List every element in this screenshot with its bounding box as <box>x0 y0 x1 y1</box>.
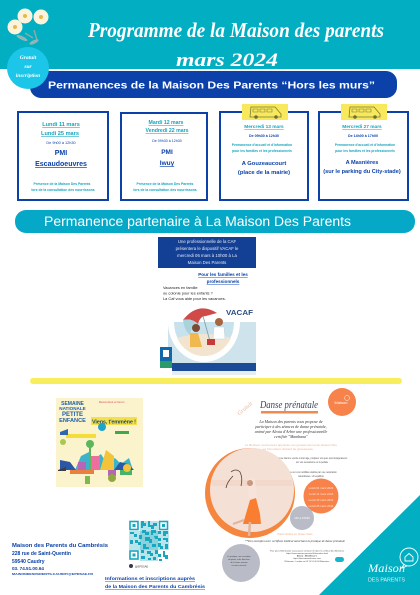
text block: informations et inscriptions <box>105 576 206 589</box>
icon: orange badge: Maison <box>335 400 347 405</box>
section heading: permanence partenaire <box>15 210 415 233</box>
text block: address <box>12 543 108 576</box>
icon: social handle: @EPDSAE <box>135 564 148 568</box>
panel: card Iwuy <box>121 113 207 200</box>
text block: vacances: La Caf vous aide pour les vacances. <box>163 296 226 301</box>
text block: address: Maison des Parents du Cambrésis <box>12 543 108 549</box>
panel: card Escaudoeuvres: Lundi 25 mars <box>41 131 79 137</box>
text block: danse prénatale: participer à des séances de danse prénatale, <box>254 424 327 430</box>
badge: gratuit sur inscription: sur <box>23 64 33 70</box>
text block: vacances <box>163 285 226 301</box>
panel: card Masnières: Permanence d'accueil et d'information <box>335 143 395 147</box>
section heading: hors les murs <box>30 71 397 98</box>
text block: renseignements danse: https://alexiamamahouse.com <box>293 557 321 560</box>
panel: card Iwuy: Mardi 12 mars <box>149 120 184 126</box>
text block: danse prénatale: Danse dans le ventre à tout âge, préparer vos jeux accompagnateurs <box>277 457 348 460</box>
badge: gratuit sur inscription: inscription <box>16 73 40 79</box>
callout: large grey circle: La pratique, une sensation <box>227 555 251 558</box>
text block: address: 228 rue de Saint-Quentin <box>12 551 71 557</box>
text block: danse prénatale: Le Bonheur commencez apprécier vos grosses tant et de douleur libre <box>245 443 337 447</box>
title <box>87 18 384 71</box>
callout: CAF: Maison Des Parents <box>188 260 226 265</box>
badge: gratuit sur inscription <box>7 47 49 89</box>
panel: card Gouzeaucourt: (place de la mairie) <box>238 170 290 176</box>
text block: place de la danse <box>245 532 345 543</box>
poster: Semaine nationale de la petite enfance: SEMAINE <box>61 401 85 407</box>
text block: danse prénatale: sur vos sensations en la pédale <box>296 461 329 464</box>
panel: card Iwuy: lors de la consultation des nourrissons <box>133 188 197 192</box>
callout: large grey circle <box>222 544 260 582</box>
callout: large grey circle: de la future maman <box>230 561 248 564</box>
poster: Semaine nationale de la petite enfance: ENFANCE <box>59 418 86 424</box>
callout: CAF: Une professionnelle de la CAF <box>178 239 237 244</box>
text block: renseignements danse: https://www.mamas-prenatal.fr/formation.html <box>286 552 328 555</box>
text block: danse prénatale: Gratuit <box>237 401 254 417</box>
panel: card Gouzeaucourt: De 09h30 à 12h30 <box>249 134 279 138</box>
panel: card Escaudoeuvres: PMI <box>55 150 67 157</box>
text block: address: MAISONDESPARENTS.CAUDRY@EPDSAE.FR <box>12 572 94 576</box>
icon: flowers <box>8 8 48 46</box>
callout: orange dates circle: Lundi 18 mars 2024 <box>309 498 334 502</box>
illustration: VACAF: VACAF <box>226 308 253 317</box>
panel: card Escaudoeuvres: De 9h00 à 12h30 <box>46 141 76 145</box>
section heading: hors les murs: Permanences de la Maison Des Parents “Hors les murs” <box>48 80 375 92</box>
button: teal pill <box>335 557 344 562</box>
callout: grey circle <box>290 506 314 530</box>
icon: speech bubble house <box>400 548 418 568</box>
text block: danse prénatale: naturalisées. Un équilibre <box>298 475 325 478</box>
callout: orange dates circle: Lundi 11 mars 2024 <box>309 492 334 496</box>
header band <box>0 0 420 71</box>
text block: danse prénatale: La Maison des parents vous propose de <box>258 419 323 424</box>
logo: Maison des parents corner: Maison <box>367 561 405 575</box>
section heading: permanence partenaire: Permanence partenaire à La Maison Des Parents <box>44 214 351 229</box>
text block: renseignements danse: Pour plus d'information vous pouvez contacter le dans le certificat des Mamatres <box>270 550 344 552</box>
panel: card Escaudoeuvres: Escaudoeuvres <box>35 161 87 168</box>
callout: large grey circle: de plaisir et de bien-être <box>228 558 251 561</box>
panel: card Escaudoeuvres: Présence de la Maison Des Parents <box>34 182 91 186</box>
panel: card Gouzeaucourt: Mercredi 13 mars <box>244 124 284 130</box>
title: mars 2024 <box>176 50 278 71</box>
text block: informations et inscriptions: de la Maison des Parents du Cambrésis <box>105 584 206 589</box>
icon: camping car <box>341 104 387 120</box>
panel: card Gouzeaucourt: A Gouzeaucourt <box>242 161 286 167</box>
panel: card Iwuy: Iwuy <box>160 160 175 167</box>
text block: address: 03. 74.51.00.64 <box>12 566 44 571</box>
panel: card Iwuy: PMI <box>161 149 173 156</box>
panel: card Iwuy: Vendredi 22 mars <box>146 128 189 134</box>
poster: Semaine nationale de la petite enfance: PETITE <box>62 412 83 418</box>
text block: danse prénatale: et l'émotion durant la grossesse <box>263 447 313 451</box>
panel: card Gouzeaucourt <box>220 104 308 200</box>
text block: danse prénatale: Douce sur vos mobilités établie par une respiration <box>285 471 338 474</box>
panel: card Gouzeaucourt: Permanence d'accueil et d'information <box>232 143 292 147</box>
text block: renseignements danse <box>270 550 344 563</box>
poster: Semaine nationale de la petite enfance <box>56 398 143 487</box>
callout: orange dates circle: Lundi 04 mars 2024 <box>309 486 334 490</box>
illustration: VACAF <box>160 308 256 375</box>
text block: danse prénatale: animé par Alexia d'Arbre une professionnelle <box>255 429 328 434</box>
text block: danse prénatale <box>237 400 348 478</box>
text block: vacances: ou colonie pour les enfants ? <box>163 290 214 296</box>
text block: danse prénatale: certifiée "Mambana" <box>274 434 308 439</box>
text block: address: 59540 Caudry <box>12 559 45 565</box>
text block: place de la danse: **Des exemples avec certificat médical autorisant la pratique de danse prénatale <box>245 539 345 543</box>
text block: pour les familles <box>198 272 248 284</box>
panel: card Escaudoeuvres: Lundi 11 mars <box>42 122 80 128</box>
callout: CAF: mercredi 06 mars à 10h00 à La <box>177 253 237 258</box>
panel: card Masnières: A Masnières <box>346 160 378 166</box>
poster: Semaine nationale de la petite enfance: Rencontres et forum <box>99 400 125 404</box>
badge: gratuit sur inscription: Gratuit <box>20 55 37 61</box>
poster: Semaine nationale de la petite enfance: NATIONALE <box>59 406 86 411</box>
icon: camping car <box>242 104 288 120</box>
text block: renseignements danse: Alexia : MamEnsor's <box>297 554 318 558</box>
callout: orange dates circle <box>304 478 338 514</box>
panel: card Gouzeaucourt: pour les familles et les professionnels <box>232 149 292 153</box>
QR code <box>129 521 169 561</box>
panel: card Masnières: De 14h00 à 17h00 <box>348 134 378 138</box>
panel: card Escaudoeuvres: lors de la consultation des nourrissons <box>31 188 95 192</box>
panel: card Escaudoeuvres <box>18 112 108 200</box>
logo: Maison des parents corner: DES PARENTS <box>368 578 405 584</box>
panel: card Iwuy: De 09h30 à 12h30 <box>152 139 182 143</box>
text block: pour les familles: professionnels <box>207 279 240 284</box>
panel: card Masnières: pour les familles et les professionnels <box>335 149 395 153</box>
panel: card Masnières: Mercredi 27 mars <box>342 124 382 130</box>
text block: place de la danse: Place limitée en flower class <box>277 532 313 536</box>
text block: pour les familles: Pour les familles et les <box>198 272 248 277</box>
text block: vacances: Vacances en famille <box>163 285 198 290</box>
panel: card Iwuy: Présence de la Maison Des Parents <box>137 182 194 186</box>
callout: CAF <box>158 237 256 268</box>
icon: orange badge <box>328 388 356 416</box>
poster: Semaine nationale de la petite enfance: Viens, t'emmène ! <box>92 420 136 426</box>
icon: social handle <box>129 564 148 568</box>
panel: card Masnières <box>319 104 408 200</box>
text block: informations et inscriptions: Informations et inscriptions auprès <box>105 576 196 581</box>
yellow divider band <box>30 378 402 384</box>
callout: CAF: présentera le dispositif VACAF le <box>176 246 239 251</box>
logo: Maison des parents corner <box>319 495 420 595</box>
title: Programme de la Maison des parents <box>87 18 384 42</box>
text block: renseignements danse: Référente : Laetitia au 03 74 51 00 64 Mamatres <box>285 560 329 563</box>
heading: danse prénatale: Danse prénatale <box>259 400 318 411</box>
panel: card Masnières: (sur le parking du City-stade) <box>323 169 401 175</box>
image: dancer circle <box>205 448 295 538</box>
callout: large grey circle: en toute sécurité <box>232 564 247 567</box>
callout: orange dates circle: Lundi 25 mars 2024 <box>309 504 334 508</box>
callout: grey circle: 14h à 15h30 <box>294 516 310 520</box>
